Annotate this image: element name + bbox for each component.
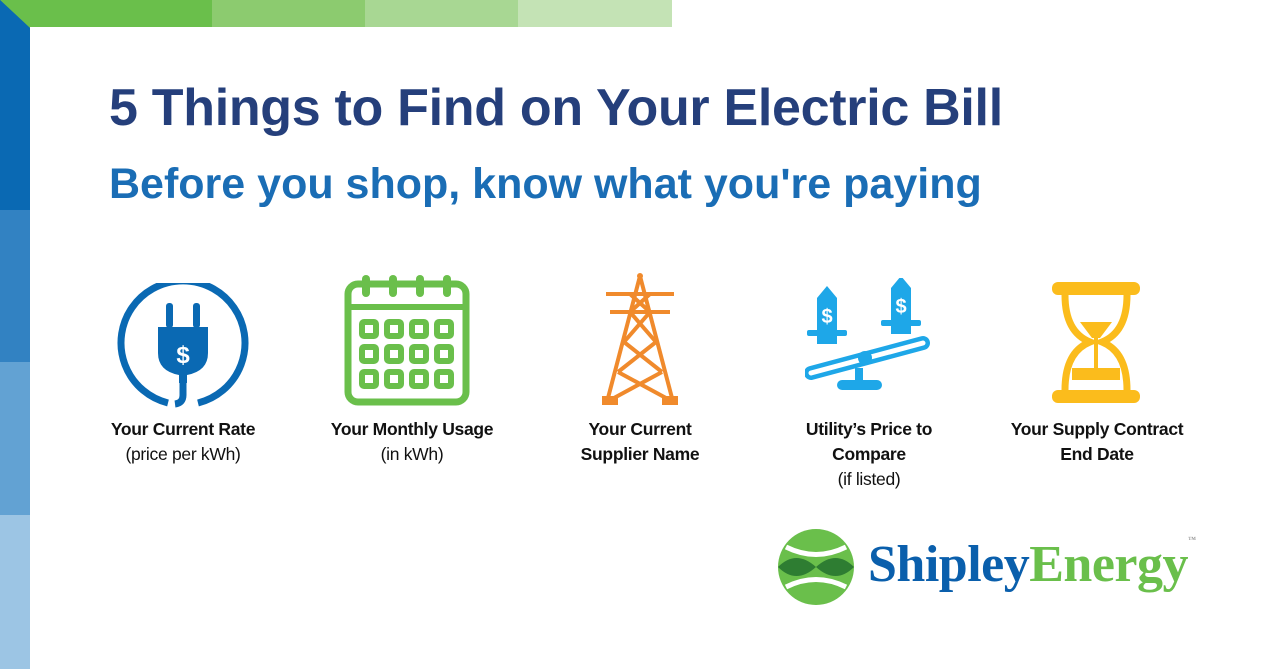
label 2: Your Monthly Usage	[331, 419, 493, 439]
icon: scale with price tags: $	[895, 296, 907, 318]
label 5	[1011, 419, 1184, 464]
label 3: Your Current	[588, 419, 692, 439]
label 5: End Date	[1060, 444, 1134, 464]
label 1: Your Current Rate	[111, 419, 255, 439]
label 4	[806, 419, 932, 489]
subtitle: Before you shop, know what you're paying	[109, 160, 982, 208]
label 4: Utility’s Price to	[806, 419, 932, 439]
label 5: Your Supply Contract	[1011, 419, 1183, 439]
logo text: ShipleyEnergy™	[868, 535, 1196, 593]
label 4: Compare	[832, 444, 906, 464]
icon: tower	[602, 273, 678, 405]
top green bar	[0, 0, 672, 28]
logo	[778, 529, 1196, 605]
icon: calendar	[344, 275, 470, 406]
label 3: Supplier Name	[581, 444, 699, 464]
title: 5 Things to Find on Your Electric Bill	[109, 79, 1003, 137]
logo globe	[778, 529, 854, 605]
icon: plug: $	[176, 342, 190, 369]
label 2: (in kWh)	[381, 444, 443, 464]
label 1	[111, 419, 255, 464]
label 1: (price per kWh)	[125, 444, 241, 464]
icon: scale with price tags: $	[821, 306, 833, 328]
icon: scale with price tags	[805, 278, 930, 390]
icon: hourglass	[1052, 282, 1140, 403]
left color bar	[0, 0, 30, 669]
label 4: (if listed)	[838, 469, 900, 489]
label 3	[581, 419, 699, 464]
label 2	[331, 419, 493, 464]
icon: plug	[118, 283, 248, 408]
